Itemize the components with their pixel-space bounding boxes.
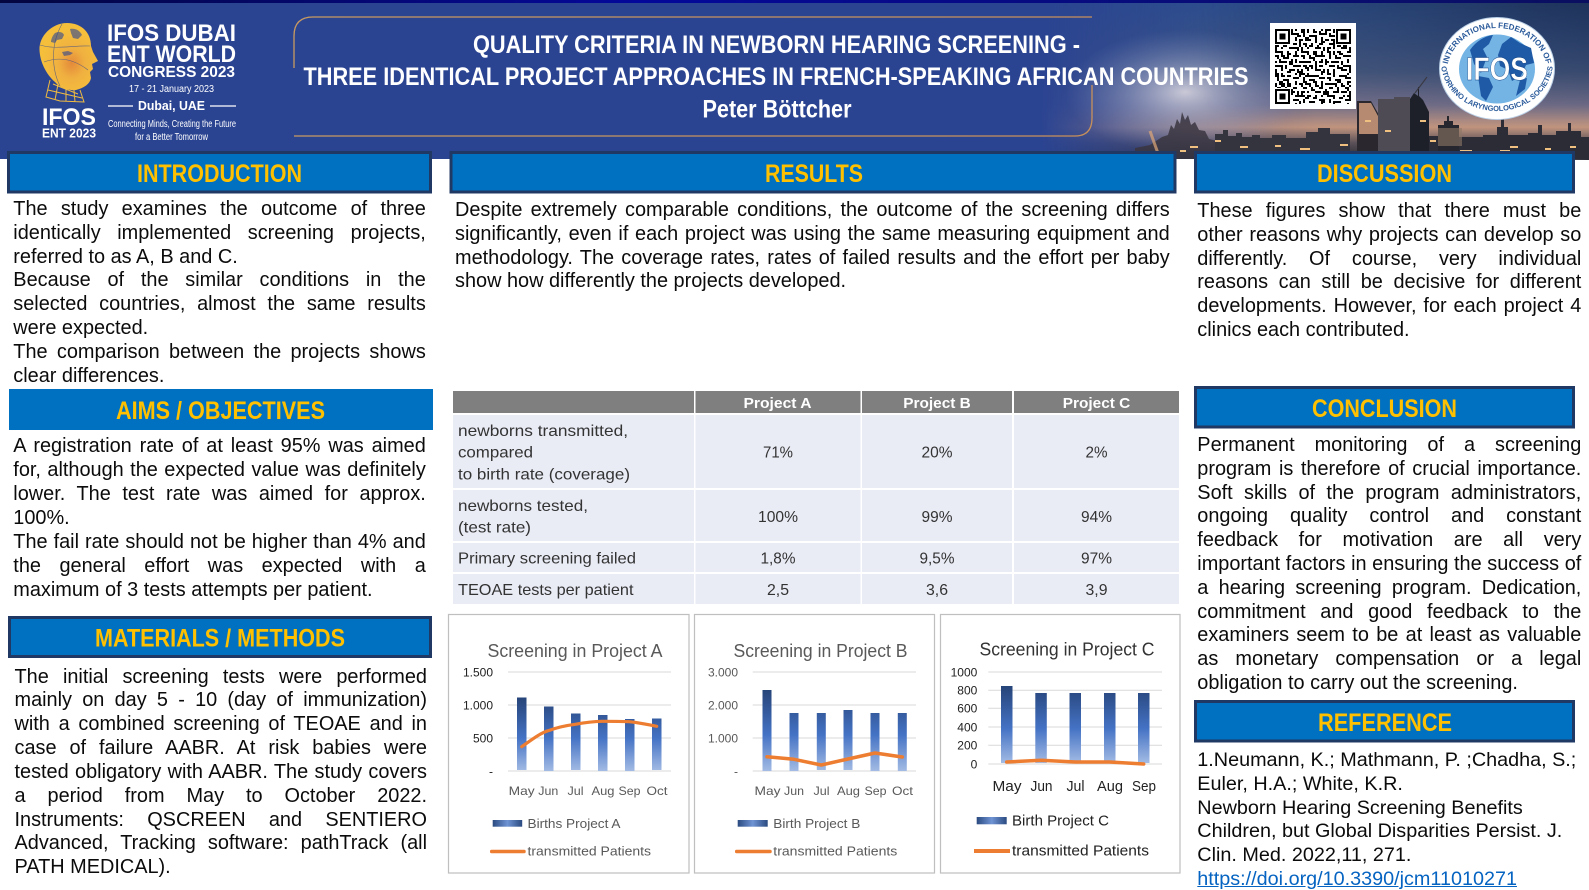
text: aims and objectives: the general effort was expected with a <box>13 554 426 576</box>
conference logo: Connecting Minds, Creating the Future <box>108 119 236 130</box>
chart: screening in project C: Jun <box>1030 779 1052 795</box>
text: discussion: other reasons why projects can develop so <box>1197 224 1581 246</box>
results table: Project C <box>1063 395 1130 412</box>
icon: IFOS seal <box>1439 17 1555 120</box>
chart: screening in project A: transmitted Patients <box>528 844 652 858</box>
results table: 3,6 <box>926 582 948 599</box>
text: introduction: clear differences. <box>13 365 164 387</box>
text: conclusion: as monetary compensation or a legal <box>1197 648 1581 670</box>
chart: screening in project A: Sep <box>618 784 641 798</box>
text: results: significantly, even if each project was using the same measuring equipment and <box>455 223 1170 245</box>
chart: screening in project B: 3.000 <box>708 666 738 680</box>
chart: screening in project B: Sep <box>864 784 887 798</box>
chart: screening in project C <box>940 614 1180 873</box>
chart: screening in project B: Oct <box>892 784 914 798</box>
chart: screening in project C: Jul <box>1066 779 1084 795</box>
text: reference: https://doi.org/10.3390/jcm11010271 <box>1197 868 1517 890</box>
chart: screening in project B <box>694 614 934 873</box>
conference logo: for a Better Tomorrow <box>135 132 209 143</box>
results table: 2,5 <box>767 582 789 599</box>
chart: screening in project C: 1000 <box>951 666 978 680</box>
text: aims and objectives: 100%. <box>13 506 70 528</box>
icon: QR code <box>1270 23 1356 109</box>
chart: screening in project A: 1.000 <box>463 698 493 712</box>
text: aims and objectives: for, although the expected value was definitely <box>13 458 426 480</box>
text: conclusion: important factors in ensuring the success of <box>1197 553 1581 575</box>
text: conclusion: examiners seem to be at least as valuable <box>1197 624 1581 646</box>
results table: compared <box>458 444 533 462</box>
text: aims and objectives: maximum of 3 tests attempts per patient. <box>13 578 373 600</box>
results table: 3,9 <box>1086 582 1108 599</box>
text: introduction: selected countries, almost the same results <box>13 293 426 315</box>
conference logo: IFOS DUBAI <box>107 20 236 47</box>
icon: IFOS seal: OTORHINO LARYNGOLOGICAL SOCIETIES <box>1442 66 1552 112</box>
chart: screening in project C: 400 <box>957 720 978 734</box>
results table: Project B <box>903 395 971 412</box>
chart: screening in project B: Jul <box>814 784 830 798</box>
text: aims and objectives: The fail rate should not be higher than 4% and <box>13 530 426 552</box>
conference logo: 17 - 21 January 2023 <box>129 84 214 95</box>
text: introduction: identically implemented screening projects, <box>13 222 426 244</box>
heading: aims <box>9 389 433 430</box>
text: materials and methods: The initial screening tests were performed <box>14 666 427 688</box>
text: reference: 1.Neumann, K.; Mathmann, P. ;Chadha, S.; <box>1197 749 1576 771</box>
text: conclusion <box>1197 434 1582 694</box>
text: materials and methods: Instruments: QSCREEN and SENTIERO <box>14 809 427 831</box>
results table: 97% <box>1081 550 1112 568</box>
heading: materials and methods <box>10 618 430 656</box>
results table: newborns tested, <box>458 498 588 515</box>
text: conclusion: obligation to carry out the screening. <box>1197 672 1518 694</box>
heading: materials and methods: MATERIALS / METHODS <box>95 624 345 652</box>
heading: discussion: DISCUSSION <box>1317 160 1452 188</box>
conference logo: ENT WORLD <box>107 41 236 68</box>
results table: 9,5% <box>920 550 954 568</box>
text: aims and objectives: lower. The test rate was aimed for approx. <box>13 482 426 504</box>
results table: 2% <box>1086 444 1108 462</box>
results table: newborns transmitted, <box>458 423 628 440</box>
title frame <box>294 17 1092 136</box>
chart: screening in project B: Screening in Project B <box>734 641 908 661</box>
text: introduction: were expected. <box>13 317 148 339</box>
chart: screening in project C: May <box>992 779 1022 795</box>
chart: screening in project C: Sep <box>1132 779 1156 795</box>
heading: results: RESULTS <box>765 160 863 188</box>
text: conclusion: commitment and good feedback to the <box>1197 601 1581 623</box>
chart: screening in project A: May <box>509 784 535 798</box>
chart: screening in project B: Aug <box>837 784 860 798</box>
text: introduction: The comparison between the projects shows <box>13 341 426 363</box>
text: conclusion: ongoing quality control and constant <box>1197 505 1581 527</box>
text: discussion <box>1197 200 1582 341</box>
text: reference: Newborn Hearing Screening Benefits <box>1197 797 1523 819</box>
chart: screening in project A: Jul <box>568 784 584 798</box>
chart: screening in project A: 500 <box>473 732 493 746</box>
text: discussion: differently. Of course, very individual <box>1197 248 1581 270</box>
text: reference: Children, but Global Disparities Persist. J. <box>1197 820 1562 842</box>
title <box>304 31 1248 124</box>
text: materials and methods: a period from May to October 2022. <box>14 785 427 807</box>
heading: aims: AIMS / OBJECTIVES <box>116 397 325 425</box>
text: conclusion: Permanent monitoring of a screening <box>1197 434 1581 456</box>
heading: discussion <box>1196 152 1574 192</box>
text: discussion: These figures show that there must be <box>1197 200 1581 222</box>
heading: reference: REFERENCE <box>1318 709 1452 737</box>
text: reference: Euler, H.A.; White, K.R. <box>1197 773 1403 795</box>
heading: introduction: INTRODUCTION <box>137 160 302 188</box>
text: results <box>455 199 1170 292</box>
heading: results <box>451 152 1175 192</box>
chart: screening in project B: Jun <box>784 784 804 798</box>
chart: screening in project A: Jun <box>538 784 558 798</box>
text: conclusion: feedback for motivation are all very <box>1197 529 1581 551</box>
text: results: show how differently the projects developed. <box>455 270 846 292</box>
heading: conclusion <box>1196 388 1574 427</box>
header banner <box>0 0 1589 160</box>
results table: 20% <box>922 444 952 462</box>
text: materials and methods: tested obligatory with AABR. The study covers <box>14 761 427 783</box>
results table <box>453 391 1179 604</box>
heading: conclusion: CONCLUSION <box>1312 395 1457 423</box>
title: QUALITY CRITERIA IN NEWBORN HEARING SCREENING - <box>473 31 1080 59</box>
chart: screening in project C: Birth Project C <box>1012 814 1109 830</box>
text: materials and methods <box>14 666 427 878</box>
text: conclusion: Soft skills of the program administrators, <box>1197 482 1581 504</box>
text: introduction: The study examines the outcome of three <box>13 198 426 220</box>
chart: screening in project C: Screening in Project C <box>980 640 1154 660</box>
conference logo <box>39 20 236 143</box>
text: conclusion: program is therefore of crucial importance. <box>1197 458 1581 480</box>
conference logo: Dubai, UAE <box>138 98 205 113</box>
text: discussion: reasons can still be decisive for different <box>1197 271 1581 293</box>
text: reference: Clin. Med. 2022,11, 271. <box>1197 844 1411 866</box>
text: discussion: clinics each contributed. <box>1197 319 1410 341</box>
icon: IFOS seal: INTERNATIONAL FEDERATION OF <box>1442 22 1552 64</box>
chart: screening in project B: May <box>754 784 780 798</box>
text: materials and methods: mainly on day 5 - 10 (day of immunization) <box>14 689 427 711</box>
chart: screening in project C: 200 <box>957 738 978 752</box>
text: introduction <box>13 198 426 387</box>
chart: screening in project C: transmitted Patients <box>1012 844 1149 860</box>
chart: screening in project A: - <box>489 764 493 778</box>
chart: screening in project B: 1.000 <box>708 732 738 746</box>
text: materials and methods: Advanced, Tracking software: pathTrack (all <box>14 832 427 854</box>
text: results: methodology. The coverage rates, rates of failed results and the effort per baby <box>455 247 1170 269</box>
text: materials and methods: with a combined screening of TEOAE and in <box>14 713 427 735</box>
text: aims and objectives: A registration rate of at least 95% was aimed <box>13 434 426 456</box>
results table: TEOAE tests per patient <box>458 582 634 599</box>
icon: globe head <box>39 23 98 102</box>
chart: screening in project B: - <box>734 764 738 778</box>
results table: 71% <box>763 444 793 462</box>
chart: screening in project A: Births Project A <box>528 816 621 831</box>
results table: 100% <box>758 509 798 526</box>
chart: screening in project C: Aug <box>1097 779 1123 795</box>
icon: IFOS seal: IFOS <box>1466 51 1528 87</box>
results table: 94% <box>1081 509 1112 526</box>
chart: screening in project B: Birth Project B <box>773 816 860 831</box>
chart: screening in project B: 2.000 <box>708 698 738 712</box>
text: discussion: developments. However, for each project 4 <box>1197 295 1581 317</box>
text: materials and methods: PATH MEDICAL). <box>14 856 171 878</box>
heading: introduction <box>8 152 430 192</box>
chart: screening in project A <box>448 614 689 873</box>
results table: (test rate) <box>458 520 531 536</box>
results table: 99% <box>922 509 952 526</box>
results table: Primary screening failed <box>458 550 636 568</box>
conference logo: IFOS <box>42 104 96 131</box>
chart: screening in project C: 0 <box>971 758 978 772</box>
title: Peter Böttcher <box>702 96 852 124</box>
chart: screening in project C: 800 <box>957 684 978 698</box>
conference logo: CONGRESS 2023 <box>108 64 235 81</box>
text: reference <box>1197 749 1576 890</box>
chart: screening in project A: Screening in Project A <box>488 641 662 661</box>
chart: screening in project B: transmitted Patients <box>773 844 898 858</box>
results table: to birth rate (coverage) <box>458 466 630 484</box>
chart: screening in project A: 1.500 <box>463 666 493 680</box>
chart: screening in project A: Oct <box>646 784 668 798</box>
text: aims and objectives <box>13 434 426 600</box>
title: THREE IDENTICAL PROJECT APPROACHES IN FRENCH-SPEAKING AFRICAN COUNTRIES <box>304 63 1248 91</box>
chart: screening in project A: Aug <box>592 784 614 798</box>
text: results: Despite extremely comparable conditions, the outcome of the screening differs <box>455 199 1170 221</box>
heading: reference <box>1196 702 1574 741</box>
results table: Project A <box>744 395 812 412</box>
results table: 1,8% <box>760 550 796 568</box>
text: materials and methods: case of failure AABR. At risk babies were <box>14 737 427 759</box>
text: introduction: referred to as A, B and C. <box>13 246 238 268</box>
conference logo: ENT 2023 <box>42 126 96 140</box>
text: conclusion: a hearing screening program. Dedication, <box>1197 577 1581 599</box>
text: introduction: Because of the similar conditions in the <box>13 269 426 291</box>
chart: screening in project C: 600 <box>957 702 978 716</box>
